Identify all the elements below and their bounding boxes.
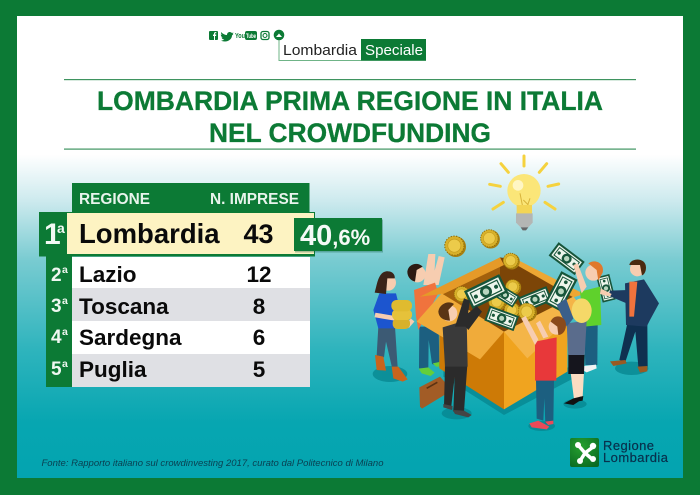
row: Toscana: 3 [51, 296, 62, 317]
logo: Lombardia Speciale [274, 30, 426, 60]
rows 2 to 5 [46, 256, 310, 387]
source note: Fonte: Rapporto italiano sul crowdinvesting 2017, curato dal Politecnico di Milano [42, 458, 384, 469]
person: man in green shirt [573, 261, 612, 372]
row: Lazio: 12 [246, 262, 272, 287]
social media icons [209, 31, 269, 42]
row: Toscana: 8 [253, 294, 265, 319]
logo: Lombardia Speciale: Lombardia [283, 42, 358, 59]
icon: youtube [235, 31, 257, 40]
row: Toscana: Toscana [79, 294, 169, 319]
icon: youtube: You [235, 31, 245, 40]
row: Lazio [51, 262, 272, 287]
table header: REGIONE [79, 191, 150, 208]
logo: Regione Lombardia: Regione [603, 438, 654, 453]
callout: percentage 40,6%: 40,6% [300, 220, 370, 252]
row: Toscana [51, 294, 265, 319]
row: Puglia: Puglia [79, 357, 147, 382]
row: Puglia [51, 357, 265, 382]
icon: twitter [221, 32, 234, 42]
row: Lazio: a [62, 264, 68, 276]
row: Sardegna: 4 [51, 327, 62, 348]
row: Lombardia highlighted [39, 212, 315, 256]
logo: Lombardia Speciale: Speciale [365, 42, 423, 59]
logo: Regione Lombardia [570, 438, 669, 467]
row: Sardegna: 6 [253, 325, 265, 350]
row: Lombardia highlighted: Lombardia [79, 218, 220, 249]
person: blonde woman [557, 298, 592, 405]
cardboard box [417, 257, 584, 409]
row: Sardegna [51, 325, 265, 350]
row: Lombardia highlighted: a [57, 220, 65, 236]
icon: facebook [209, 31, 218, 40]
title: NEL CROWDFUNDING [209, 118, 491, 148]
row: Lazio: Lazio [79, 262, 137, 287]
row: Lombardia highlighted: 43 [243, 219, 274, 249]
illustration: crowdfunding box with people [373, 156, 659, 431]
row: Sardegna: a [62, 326, 68, 338]
row: Lombardia highlighted: 1 [44, 218, 61, 251]
icon: instagram [261, 32, 269, 40]
falling coins and banknotes [445, 230, 615, 310]
row: Toscana: a [62, 295, 68, 307]
person: woman with coin stack [373, 271, 413, 382]
icon: Regione Lombardia rose [570, 438, 599, 467]
row: Puglia: 5 [253, 357, 265, 382]
logo: Regione Lombardia: Lombardia [603, 450, 669, 465]
person: man in red shirt [521, 316, 566, 429]
table header [72, 183, 310, 213]
money inside the box [454, 276, 551, 330]
ranking table [39, 183, 383, 387]
row: Lazio: 2 [51, 265, 62, 286]
row: Puglia: a [62, 358, 68, 370]
icon: youtube: Tube [246, 33, 256, 40]
person: man in navy suit [608, 260, 659, 373]
row: Sardegna: Sardegna [79, 325, 182, 350]
floor shadows [373, 362, 648, 431]
title [64, 79, 636, 150]
row: Puglia: 5 [51, 359, 62, 380]
table header: N. IMPRESE [210, 191, 299, 208]
person: man in orange shirt [407, 254, 445, 376]
title: LOMBARDIA PRIMA REGIONE IN ITALIA [97, 86, 603, 116]
person: man in dark suit with briefcase [419, 298, 482, 417]
icon: light bulb [490, 156, 559, 230]
